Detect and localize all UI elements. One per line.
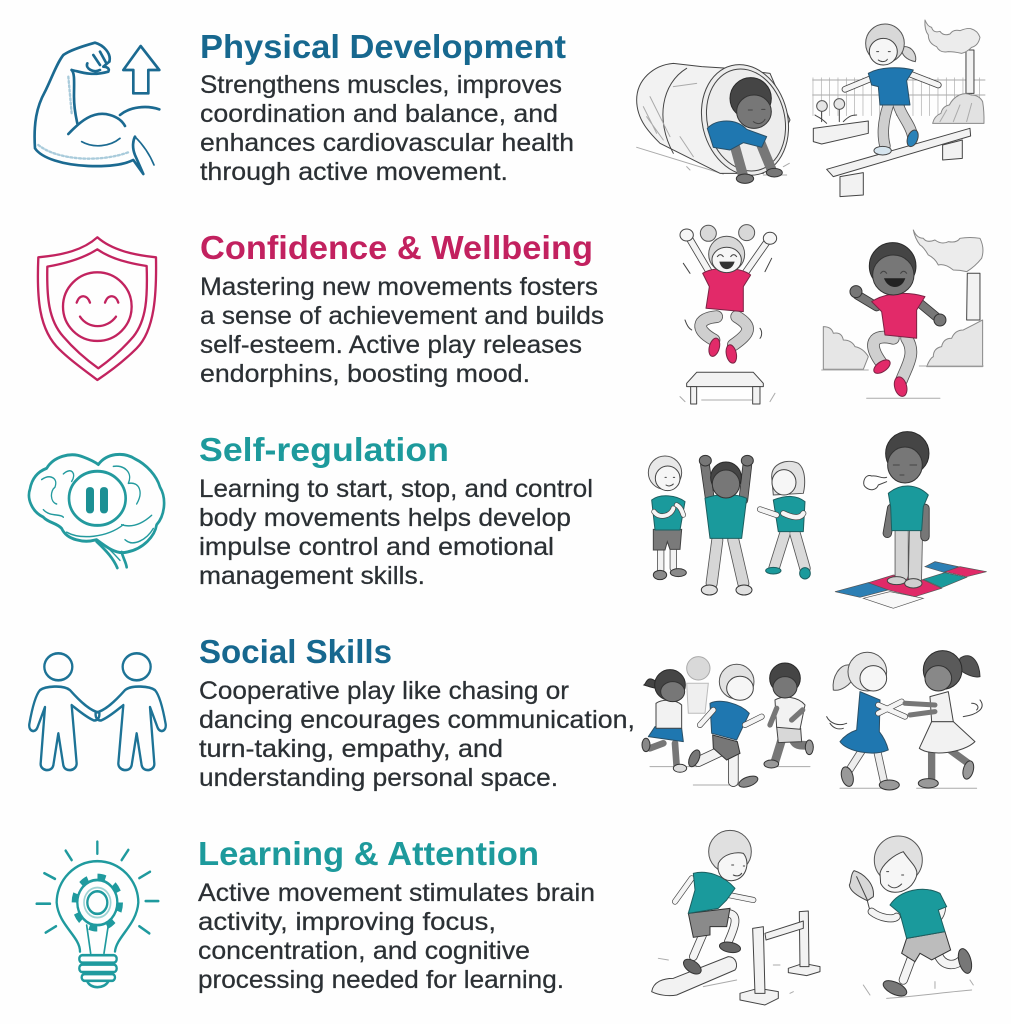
heading: self-regulation: Self-regulation: [199, 431, 449, 468]
illustration: boy breathing on coloured mat: [835, 432, 987, 608]
text block: physical development: enhances cardiovascular health: [200, 129, 574, 157]
icon: shield with smiling face: [38, 237, 156, 380]
illustration: boy running with a leaf: [849, 836, 974, 999]
heading: social skills: Social Skills: [199, 633, 392, 670]
text block: physical development: Strengthens muscles, improves: [200, 71, 562, 99]
text block: learning and attention: processing needed for learning.: [198, 966, 564, 994]
text block: physical development: through active movement.: [200, 158, 508, 186]
panel: learning and attention: [37, 830, 974, 1005]
illustration: boy on log and hurdle: [652, 830, 820, 1005]
text block: self-regulation: impulse control and emotional: [199, 533, 554, 561]
text block: confidence and wellbeing: a sense of achievement and builds: [200, 302, 604, 330]
text block: confidence and wellbeing: [200, 273, 604, 388]
illustration: child crawling through tunnel: [637, 55, 800, 185]
illustration: two girls dancing: [827, 651, 982, 790]
text block: confidence and wellbeing: endorphins, boosting mood.: [200, 360, 530, 388]
icon: light bulb with gear: [37, 842, 158, 987]
text block: learning and attention: [198, 879, 595, 994]
text block: social skills: [199, 677, 635, 792]
heading: learning and attention: Learning & Attention: [198, 835, 539, 872]
icon: two people shaking hands: [29, 653, 166, 770]
panel: physical development: [35, 20, 985, 197]
illustration: girl jumping off bench: [680, 225, 777, 404]
text block: learning and attention: activity, improving focus,: [198, 908, 496, 936]
panel: confidence and wellbeing: [38, 225, 983, 404]
icon: brain with pause symbol: [29, 454, 164, 568]
illustration: three children copying movements: [648, 455, 810, 595]
illustration: children chasing each other: [642, 657, 813, 789]
panel: self-regulation: [29, 431, 987, 608]
text block: self-regulation: management skills.: [199, 562, 425, 590]
text block: social skills: dancing encourages communication,: [199, 706, 635, 734]
text block: social skills: understanding personal space.: [199, 764, 558, 792]
illustration: boy jumping in garden: [822, 230, 983, 398]
heading: confidence and wellbeing: Confidence & Wellbeing: [200, 229, 593, 266]
text block: self-regulation: [199, 475, 593, 590]
illustration: child on balance beam in garden: [813, 20, 985, 197]
text block: confidence and wellbeing: Mastering new movements fosters: [200, 273, 598, 301]
text block: confidence and wellbeing: self-esteem. Active play releases: [200, 331, 582, 359]
text block: learning and attention: Active movement stimulates brain: [198, 879, 595, 907]
text block: self-regulation: body movements helps develop: [199, 504, 571, 532]
text block: social skills: turn-taking, empathy, and: [199, 735, 503, 763]
text block: social skills: Cooperative play like chasing or: [199, 677, 569, 705]
text block: physical development: [200, 71, 574, 186]
text block: self-regulation: Learning to start, stop, and control: [199, 475, 593, 503]
text block: physical development: coordination and balance, and: [200, 100, 558, 128]
icon: flexed arm with up arrow: [35, 43, 159, 174]
mat: [835, 562, 987, 608]
text block: learning and attention: concentration, and cognitive: [198, 937, 530, 965]
heading: physical development: Physical Development: [200, 28, 566, 65]
panel: social skills: [29, 633, 982, 792]
